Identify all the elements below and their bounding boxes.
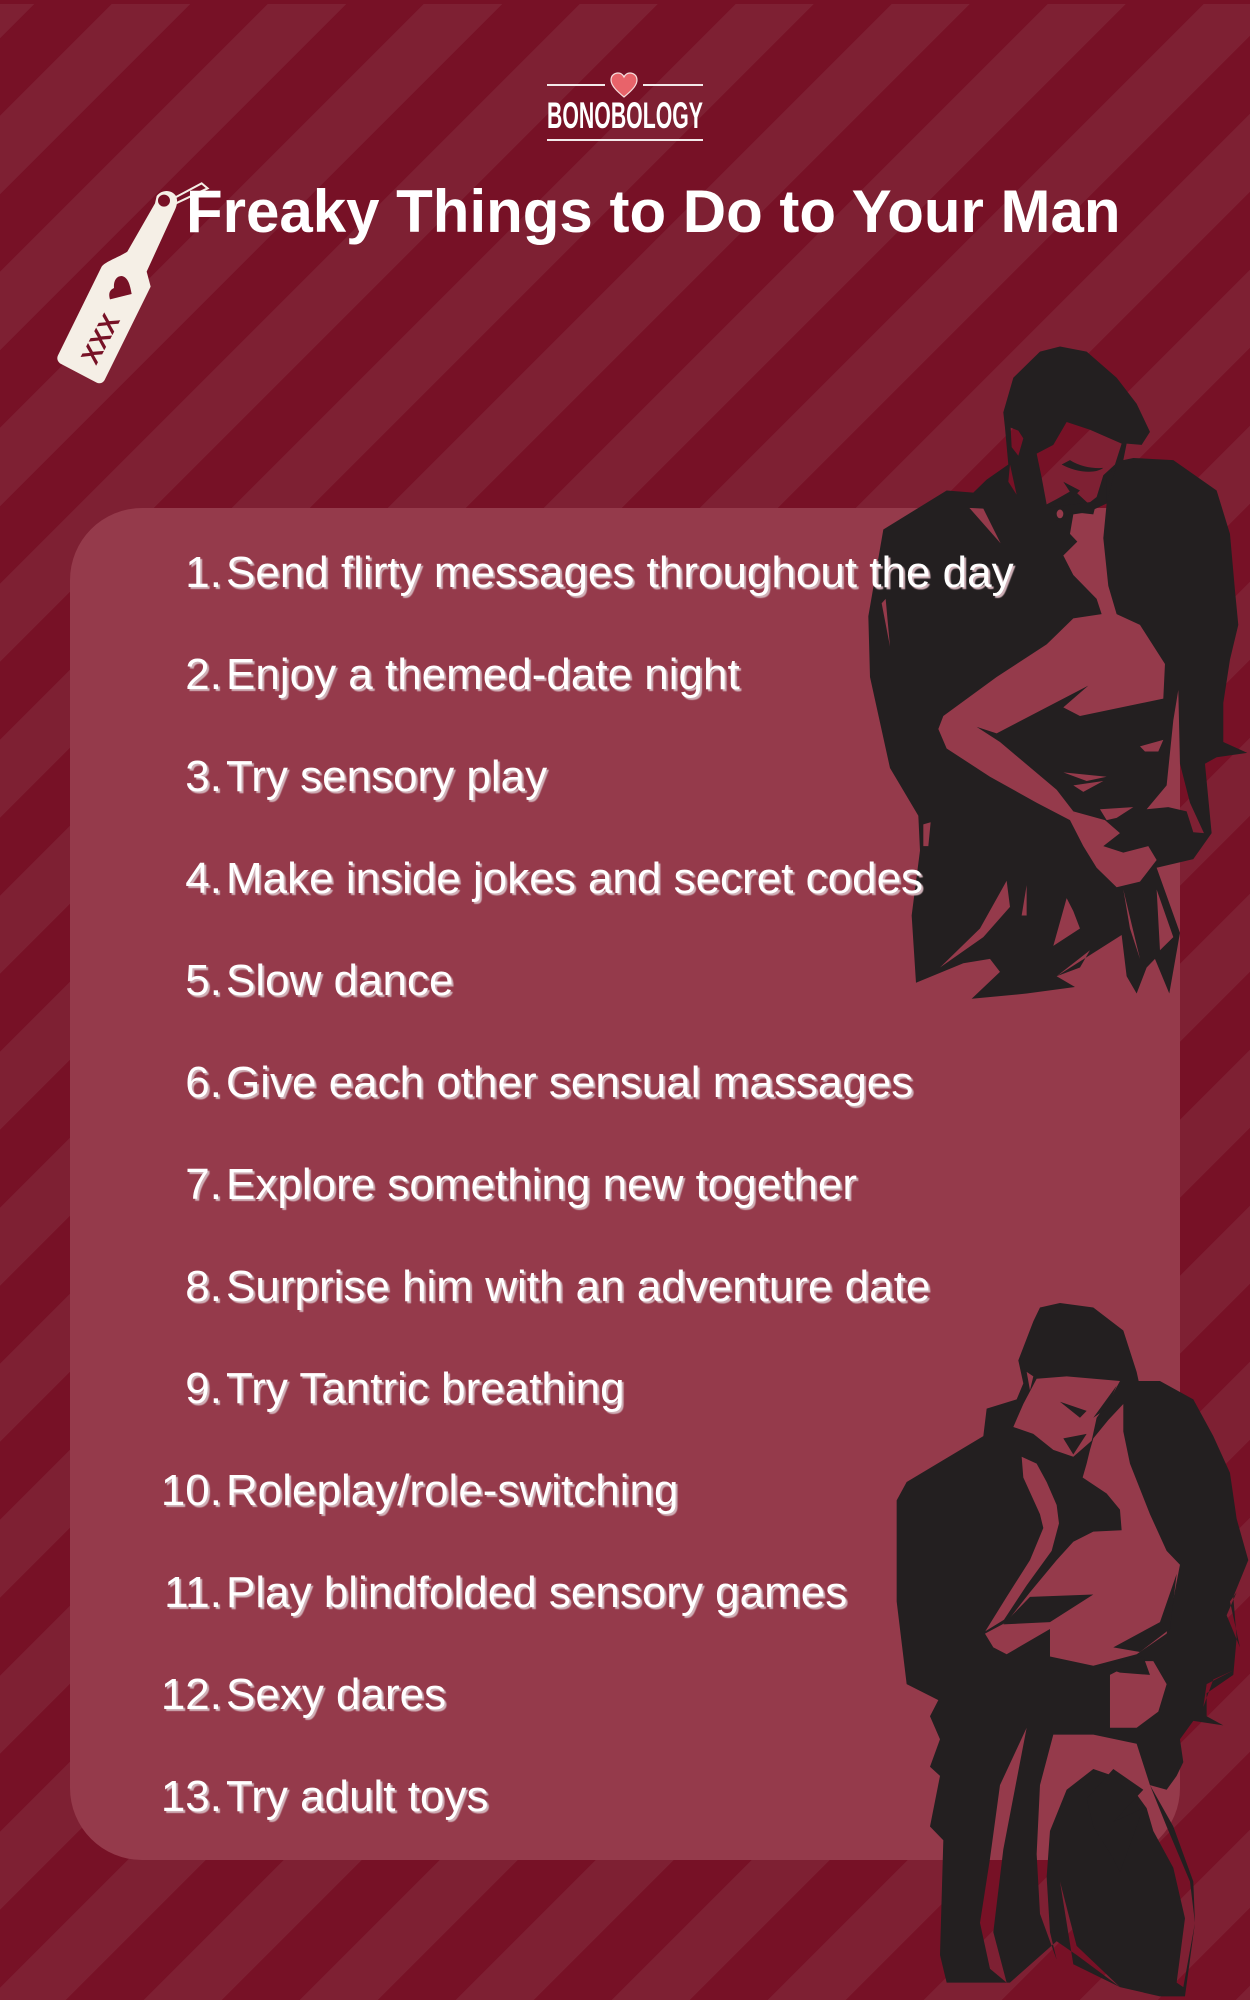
logo: Bonobology: BONOBOLOGY — [547, 95, 703, 136]
icon: XXX paddle tag: XXX — [75, 308, 126, 369]
item 11: 11. — [164, 1568, 222, 1617]
item 11: Play blindfolded sensory games — [226, 1568, 847, 1617]
item 3: Try sensory play — [226, 752, 547, 801]
title: Freaky Things to Do to Your Man — [186, 178, 1121, 245]
item 10: Roleplay/role-switching — [226, 1466, 678, 1515]
item 1: 1. — [185, 548, 222, 597]
item 4: 4. — [185, 854, 222, 903]
item 9: Try Tantric breathing — [226, 1364, 625, 1413]
item 5: Slow dance — [226, 956, 453, 1005]
item 12: Sexy dares — [226, 1670, 446, 1719]
item 6: 6. — [185, 1058, 222, 1107]
item 3: 3. — [185, 752, 222, 801]
item 8: Surprise him with an adventure date — [226, 1262, 930, 1311]
item 4: Make inside jokes and secret codes — [226, 854, 923, 903]
item 2: Enjoy a themed-date night — [226, 650, 740, 699]
item 7: 7. — [185, 1160, 222, 1209]
item 5: 5. — [185, 956, 222, 1005]
item 8: 8. — [185, 1262, 222, 1311]
item 1: Send flirty messages throughout the day — [226, 548, 1014, 597]
item 10: 10. — [161, 1466, 222, 1515]
item 7: Explore something new together — [226, 1160, 857, 1209]
item 2: 2. — [185, 650, 222, 699]
item 12: 12. — [161, 1670, 222, 1719]
item 6: Give each other sensual massages — [226, 1058, 913, 1107]
item 13: Try adult toys — [226, 1772, 488, 1821]
item 9: 9. — [185, 1364, 222, 1413]
item 13: 13. — [161, 1772, 222, 1821]
panel: list background — [70, 508, 1180, 1860]
